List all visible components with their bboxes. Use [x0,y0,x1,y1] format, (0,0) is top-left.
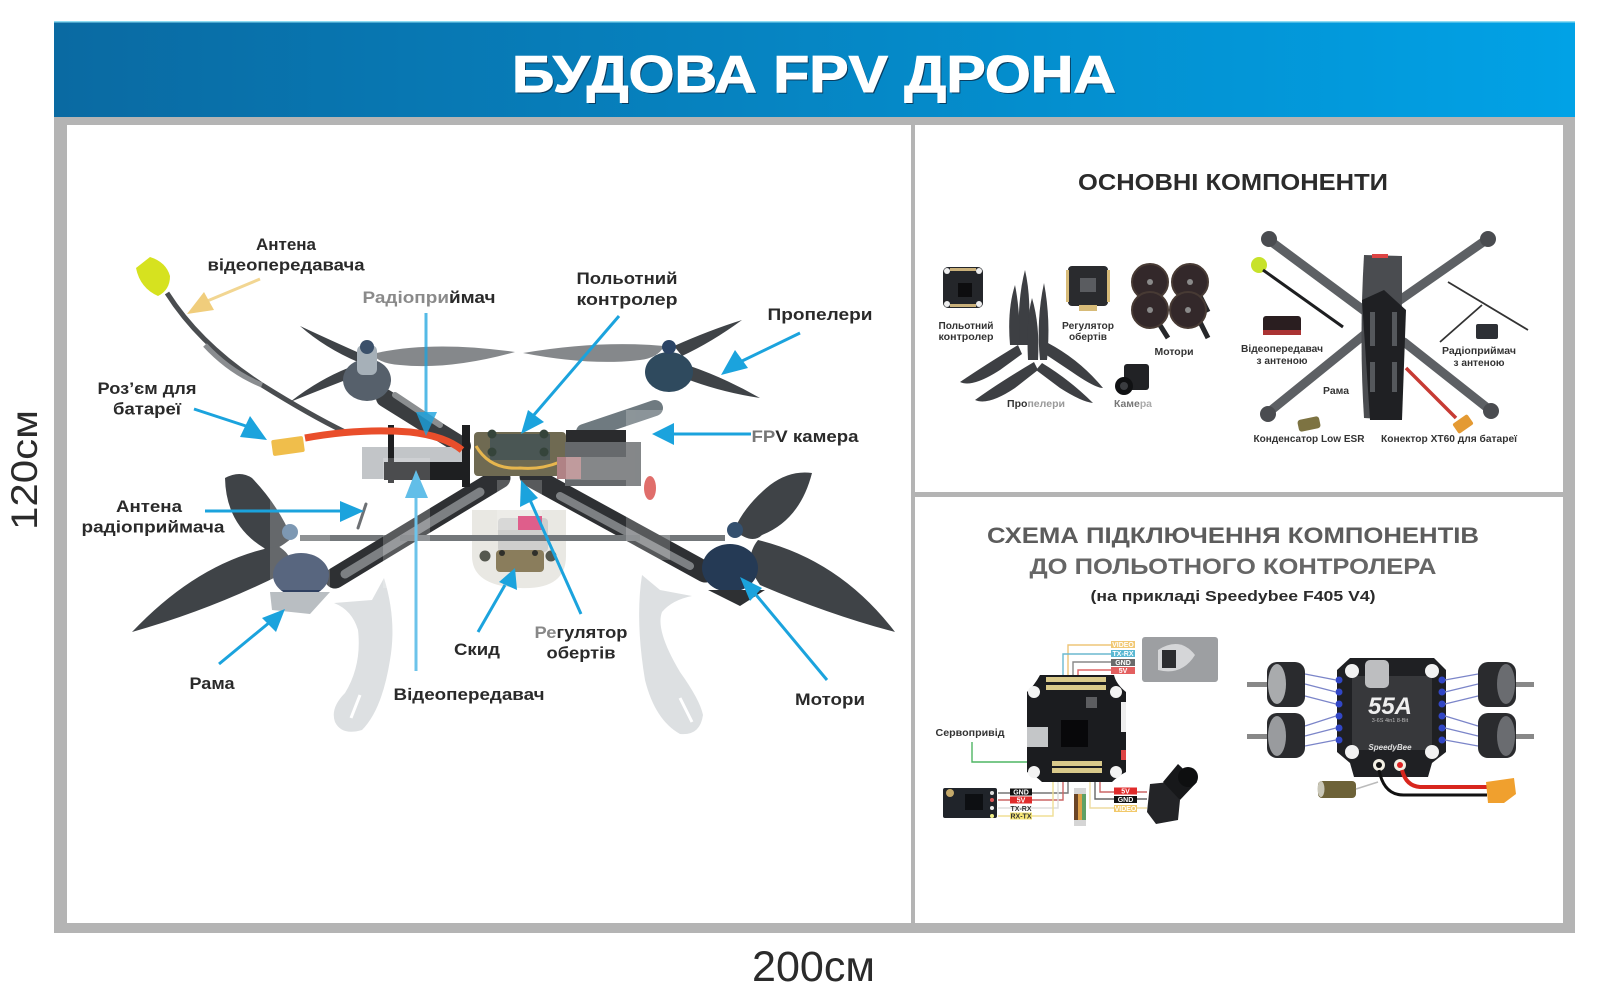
ESC stack [1336,658,1446,777]
component: receiver with antenna: Радіоприймач [1442,345,1516,357]
title banner: БУДОВА FPV ДРОНА [514,48,1118,106]
VTX wire labels: 5V [1119,668,1128,675]
component: camera: Камера [1114,398,1152,410]
arrow: propellers [721,333,800,375]
arrow: video antenna [187,279,260,314]
component: XT60 connector: Конектор XT60 для батареї [1381,433,1518,445]
arrow: battery connector [194,409,267,440]
heading: wiring diagram: ДО ПОЛЬОТНОГО КОНТРОЛЕРА [1030,554,1437,579]
VTX wire labels: VIDEO [1112,642,1134,649]
video antenna cable [136,257,345,432]
capacitor and battery connector [1318,770,1516,803]
component: flight controller: контролер [938,331,994,343]
arrow: video transmitter [405,470,428,671]
component: motors [1132,264,1208,358]
component: flight controller: Польотний [938,320,994,332]
ESC stack: SpeedyBee [1368,743,1412,752]
arrow: motors [740,577,827,680]
label: flight controller: Польотний [576,269,678,288]
component: video transmitter with antenna [1241,257,1343,367]
component: ESC: обертів [1069,331,1108,343]
heading: wiring diagram: (на прикладі Speedybee F405 V4) [1090,588,1376,605]
flight controller board [1027,675,1126,782]
heading: main components: ОСНОВНІ КОМПОНЕНТИ [1078,169,1388,195]
dimension label: width: 200см [752,943,875,991]
receiver wire labels: TX-RX [1010,806,1032,813]
connector cable [1074,788,1086,826]
component: receiver with antenna [1440,282,1528,369]
arrow: radio receiver [416,313,437,436]
component: receiver with antenna: з антеною [1454,357,1505,369]
motors: right [1478,662,1534,758]
front props [132,472,895,632]
motors [270,340,765,614]
heading: wiring diagram [987,523,1479,605]
component: frame: Рама [1323,385,1349,397]
component: XT60 connector [1381,368,1518,445]
arrows [187,279,827,680]
component: motors: Мотори [1154,346,1194,358]
VTX wire labels [1111,641,1135,675]
landing skids [334,575,703,734]
label: ESC: Регулятор [534,623,622,642]
panel: drone anatomy [82,235,895,734]
receiver wire labels [1010,788,1032,820]
label: flight controller: контролер [576,290,678,309]
labels [82,235,872,709]
arrow: flight controller [521,316,619,434]
ESC stack: 3-6S 4in1 8-Bit [1372,718,1409,724]
motor wires [1305,674,1478,746]
VTX wire labels: GND [1115,660,1131,667]
camera wire labels [1114,788,1137,813]
rear props [290,320,760,402]
label: servo: Сервопривід [936,727,1005,739]
label: battery connector: батареї [113,400,182,418]
label: FPV camera: FPV камера [752,427,859,446]
receiver module [943,788,997,818]
label: radio receiver: Радіопри ймач [362,288,496,307]
receiver wire labels: 5V [1017,798,1026,804]
battery lead and connector [271,431,462,456]
receiver antenna [358,504,366,528]
component: video transmitter with antenna: з антеною [1256,355,1308,367]
camera wire labels: VIDEO [1115,806,1137,813]
panel: wiring diagram [936,523,1534,826]
label: ESC: обертів [546,644,616,662]
arrow: radio antenna [205,501,364,522]
component: flight controller [938,267,994,343]
motors: left [1247,662,1305,758]
component: camera [1114,364,1152,410]
payload mount [400,510,640,588]
drone body [362,425,656,500]
arrow: ESC [520,480,581,614]
panel: main components [938,169,1528,445]
panel frame [54,117,1575,933]
receiver wire labels: RX-TX [1010,814,1032,820]
arrow: frame [219,609,285,664]
label: skid: Скид [454,640,500,659]
label: propellers: Пропелери [768,305,872,324]
title banner [54,21,1575,117]
component: capacitor [1254,416,1365,445]
ESC stack: 55A [1368,693,1412,720]
component: ESC [1062,266,1114,343]
label: radio antenna: Антена [116,497,183,516]
label: frame: Рама [190,674,235,693]
heading: wiring diagram: СХЕМА ПІДКЛЮЧЕННЯ КОМПОНЕНТІВ [987,523,1479,548]
VTX module [1142,637,1218,682]
component: video transmitter with antenna: Відеопередавач [1241,343,1323,355]
camera wire labels: 5V [1121,788,1130,796]
wiring: flight controller to VTX, receiver, camera [972,645,1147,816]
component: propellers [960,270,1103,410]
watermark bands [270,410,670,590]
FPV camera [1147,764,1198,824]
arrow: skid [478,568,517,632]
label: radio antenna: радіоприймача [82,518,225,536]
label: video transmitter: Відеопередавач [394,685,544,704]
component: ESC: Регулятор [1062,320,1114,332]
drone photo illustration [132,257,895,734]
component: frame [1260,231,1499,422]
label: video antenna: Антена [256,235,317,254]
dimension label: height: 120см [4,410,45,530]
component: propellers: Пропелери [1007,398,1065,410]
carbon arms [335,395,705,578]
component: capacitor: Конденсатор Low ESR [1254,433,1365,445]
title banner: БУДОВА FPV ДРОНА [512,46,1116,104]
VTX wire labels: TX-RX [1112,651,1134,658]
arrow: FPV camera [652,423,751,445]
label: motors: Мотори [795,690,865,709]
camera wire labels: GND [1118,797,1133,804]
label: battery connector: Роз’єм для [98,379,196,398]
receiver wire labels: GND [1013,790,1029,796]
label: video antenna: відеопередавача [208,256,365,274]
